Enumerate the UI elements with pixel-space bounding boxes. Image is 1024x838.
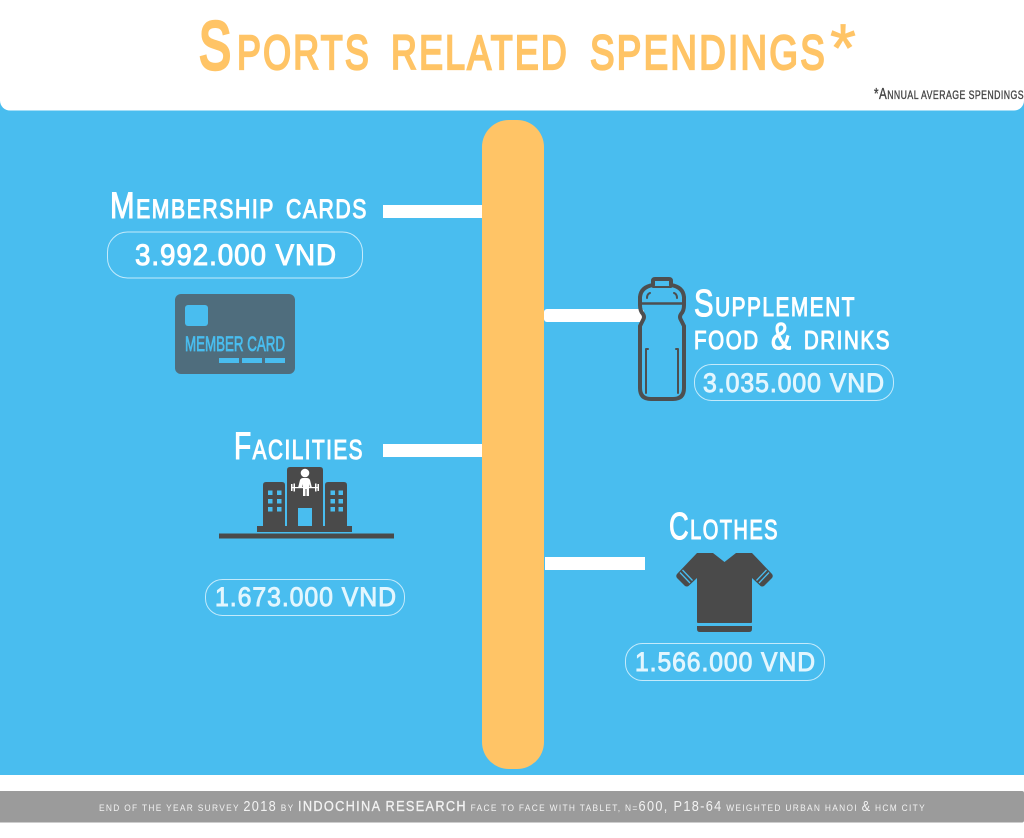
connector: clothes — [545, 557, 645, 570]
heading: facilities: FACILITIES — [234, 426, 364, 468]
heading: clothes: CLOTHES — [669, 506, 779, 548]
value pill: 1.673.000 VND: 1.673.000 VND — [215, 582, 397, 612]
value pill: 3.035.000 VND: 3.035.000 VND — [703, 368, 885, 398]
icon: water bottle — [640, 279, 684, 399]
value pill: 3.992.000 VND: 3.992.000 VND — [135, 239, 337, 272]
heading: membership cards: MEMBERSHIP CARDS — [110, 184, 368, 226]
connector: supplement — [544, 309, 644, 322]
title: SPENDINGS — [590, 27, 827, 80]
value pill: 3.992.000 VND — [108, 232, 362, 278]
heading: supplement food and drinks: SUPPLEMENT — [694, 283, 856, 325]
group: membership cards — [108, 184, 368, 374]
title — [199, 8, 856, 86]
header panel — [0, 0, 1024, 110]
group: clothes — [626, 506, 824, 680]
icon: member card: MEMBER CARD — [185, 332, 285, 356]
icon: t-shirt — [676, 553, 773, 632]
icon: gym building — [219, 467, 394, 538]
value pill: 1.566.000 VND: 1.566.000 VND — [635, 647, 816, 677]
heading: supplement food and drinks — [694, 283, 891, 358]
connector: membership — [383, 205, 482, 218]
title: * — [830, 10, 856, 86]
connector: facilities — [383, 444, 482, 457]
heading: supplement food and drinks: FOOD & DRINKS — [694, 316, 891, 358]
icon: member card — [175, 294, 295, 374]
central orange bar — [482, 120, 544, 769]
footer bar — [0, 791, 1024, 822]
title: S — [199, 8, 231, 84]
group: supplement food and drinks — [640, 279, 894, 400]
title: PORTS — [237, 27, 371, 80]
footer source text: END OF THE YEAR SURVEY 2018 BY INDOCHINA RESEARCH FACE TO FACE WITH TABLET, N=600, P18-64 WEIGHTED URBAN HANOI & HCM CITY — [99, 799, 926, 815]
title: RELATED — [391, 27, 569, 80]
group: facilities — [206, 426, 404, 616]
